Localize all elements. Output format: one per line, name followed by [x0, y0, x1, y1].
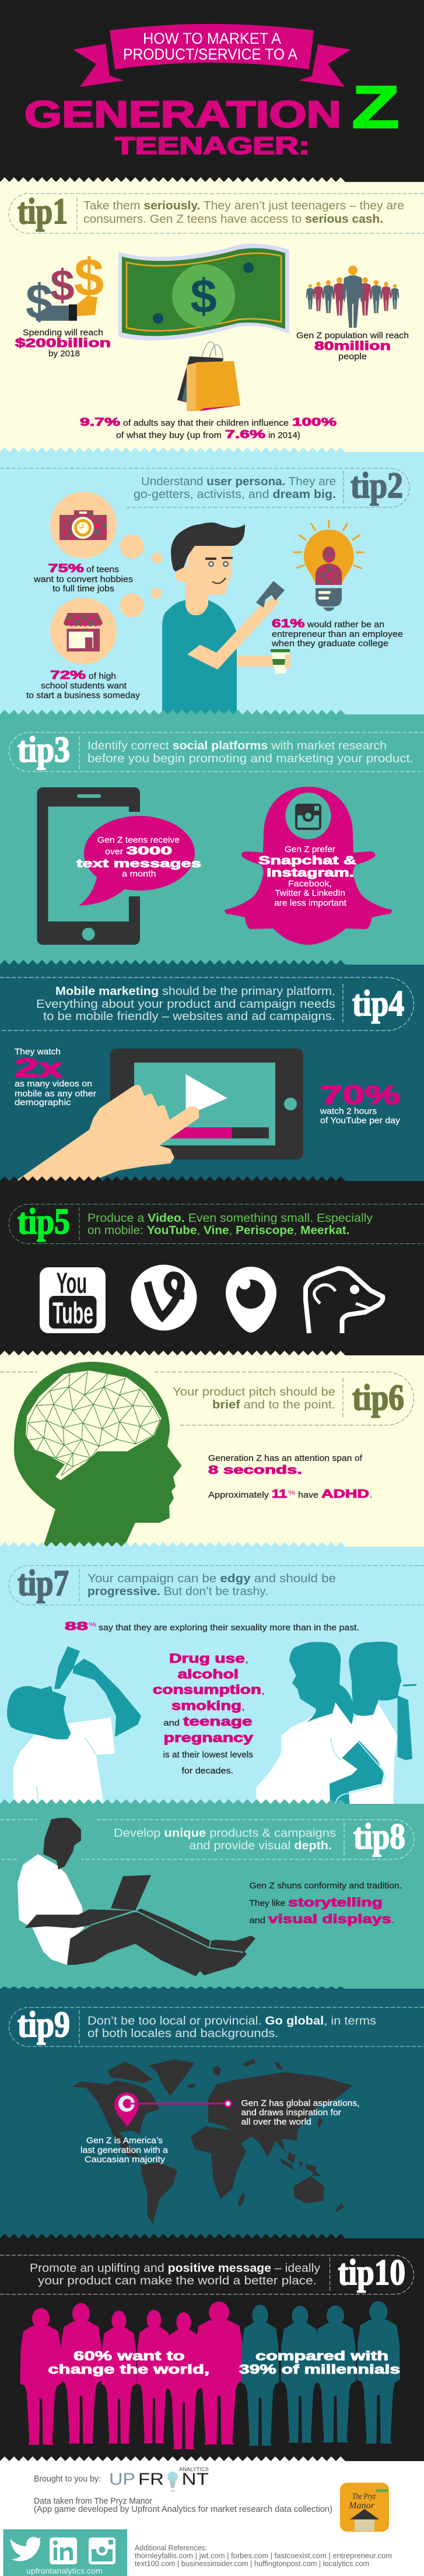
stat: gen z wants change: 60% want to	[73, 2349, 185, 2363]
stat: adults influence: 7.6%	[225, 429, 265, 441]
panel: header	[0, 0, 424, 182]
icon: shopping bags	[177, 342, 240, 411]
tip 7 label box	[9, 1565, 424, 1605]
stat: spending: by 2018	[48, 349, 80, 359]
tip 4 label box	[0, 977, 414, 1031]
tip 6 text: Your product pitch should be	[173, 1386, 335, 1399]
stat: 61 percent	[271, 617, 403, 649]
tip 7 text	[87, 1572, 336, 1598]
icon: pryz manor app: The Pryz	[352, 2492, 376, 2501]
panel: tip 2	[0, 447, 424, 719]
icon: dollar signs and hand: $	[74, 248, 104, 307]
stat: 2x videos: as many videos on	[15, 1079, 92, 1089]
tip 6 tag: tip6	[352, 1378, 404, 1418]
tip 4 tag: tip4	[352, 984, 404, 1024]
stat: millennials compare	[239, 2349, 400, 2377]
additional references: text100.com | businessinsider.com | huffingtonpost.com | localytics.com	[135, 2559, 369, 2568]
icon: dollar signs and hand: $	[26, 274, 53, 329]
tip 4 text: to be mobile friendly – websites and ad campaigns.	[43, 1010, 335, 1023]
panel: tip 10	[0, 2234, 424, 2463]
world map	[72, 2059, 353, 2224]
stat: attention span: 8 seconds.	[208, 1464, 302, 1477]
stat: 2x videos: They watch	[15, 1047, 61, 1057]
stat: 88 percent: %	[89, 1621, 96, 1628]
stat: storytelling: .	[392, 1915, 394, 1926]
icon: youtube: You	[56, 1267, 87, 1299]
tip 9 text	[87, 2014, 376, 2040]
tip 1 text: Take them seriously. They aren’t just teenagers – they are	[83, 199, 404, 212]
tip 2 tag: tip2	[351, 466, 403, 506]
speech bubble: Gen Z teens receive	[97, 835, 180, 845]
additional references	[135, 2543, 392, 2568]
list: declining risks: ,	[242, 1702, 244, 1712]
tip 10 text	[30, 2262, 320, 2287]
stat: 2x videos	[15, 1047, 96, 1107]
icon: snapchat ghost: are less important	[274, 898, 347, 908]
stat: 88 percent: 88	[65, 1620, 88, 1633]
tip 10 text: your product can make the world a better place.	[38, 2274, 317, 2287]
stat: gen z wants change: change the world,	[48, 2362, 209, 2377]
logo: upfront analytics: NT	[182, 2470, 209, 2489]
list: declining risks: alcohol	[178, 1667, 239, 1681]
tip 6 text: brief and to the point.	[212, 1399, 335, 1411]
additional references: Additional References:	[135, 2543, 207, 2552]
tip 1 text	[83, 199, 404, 226]
title line: how to market	[123, 30, 297, 63]
tip 10 tag: tip10	[338, 2253, 405, 2293]
tip 8 text: and provide visual depth.	[189, 1839, 332, 1852]
tip 8 label box	[0, 1820, 414, 1859]
icon: crowd of people	[306, 266, 399, 328]
stat: 70 percent: of YouTube per day	[320, 1116, 401, 1126]
list: declining risks: smoking	[171, 1698, 241, 1713]
stat: 75 percent: 75%	[48, 562, 84, 575]
stat: population: people	[338, 352, 367, 362]
stat: population: 80million	[314, 339, 391, 353]
stat: adhd: Approximately	[208, 1490, 269, 1500]
icon: snapchat ghost	[225, 787, 392, 945]
stat: 88 percent: say that they are exploring their sexuality more than in the past.	[99, 1622, 359, 1633]
icon: smartphone	[37, 787, 141, 945]
list: declining risks: ,	[262, 1687, 264, 1697]
stat: 61 percent: when they graduate college	[271, 639, 388, 649]
tip 5 text: Produce a Video. Even something small. Especially	[87, 1212, 373, 1225]
tip 3 text	[87, 739, 414, 765]
tip 9 text: of both locales and backgrounds.	[87, 2027, 279, 2040]
panel: tip 8	[0, 1799, 424, 1993]
tip 8 text: Develop unique products & campaigns	[114, 1827, 336, 1839]
stat: 72 percent: 72%	[50, 669, 86, 682]
stat: storytelling: and	[250, 1915, 265, 1926]
tip 4 text	[36, 985, 335, 1023]
list: declining risks: Drug use	[169, 1651, 245, 1666]
panel: tip 5	[0, 1176, 424, 1356]
logo: upfront analytics: UP	[109, 2470, 135, 2489]
stat: 75 percent: of teens	[86, 565, 119, 574]
speech bubble: a month	[122, 869, 156, 879]
stat: gen z wants change	[48, 2349, 209, 2377]
icon: periscope	[226, 1267, 276, 1333]
tip 6 label box	[0, 1372, 414, 1425]
title: teenager: TEENAGER:	[115, 132, 310, 159]
stat: adhd	[208, 1488, 372, 1501]
stat: 70 percent: 70%	[320, 1080, 400, 1110]
icon: dollar bill	[118, 244, 289, 341]
icon: meerkat	[306, 1268, 383, 1333]
stat: storytelling: They like	[250, 1898, 285, 1908]
tip 4 text: Mobile marketing should be the primary platform.	[55, 985, 335, 998]
stat: spending	[15, 328, 111, 359]
callout: caucasian majority	[80, 2136, 169, 2165]
callout: global aspirations	[241, 2098, 359, 2127]
list: declining risks: teenage	[183, 1714, 252, 1729]
stat: 2x videos: 2x	[15, 1053, 63, 1083]
stat: 61 percent: would rather be an	[307, 619, 384, 629]
tip 8 tag: tip8	[353, 1817, 405, 1856]
brought to you by: Brought to you by:	[34, 2474, 101, 2484]
list: declining risks: for decades.	[182, 1766, 233, 1776]
tip 5 text: on mobile: YouTube, Vine, Periscope, Meerkat.	[87, 1224, 350, 1237]
stat: population: Gen Z population will reach	[296, 331, 409, 341]
stat: adults influence: 9.7%	[80, 416, 120, 429]
stat: 88 percent	[65, 1620, 359, 1633]
tip 10 label box	[0, 2255, 414, 2294]
icon: dollar signs and hand: $	[50, 261, 75, 310]
stat: 72 percent	[26, 669, 141, 700]
panel: footer	[0, 2456, 424, 2576]
icon: snapchat ghost: Snapchat &	[258, 854, 356, 867]
data source	[34, 2496, 332, 2514]
additional references: thornleyfallis.com | jwt.com | forbes.com | fastcoexist.com | entrepreneur.com	[135, 2552, 392, 2560]
stat: 61 percent: entrepreneur than an employee	[272, 629, 403, 639]
stat: 75 percent: want to convert hobbies	[33, 574, 133, 584]
tip 1 label box	[9, 194, 424, 233]
illustration: teen drinking	[7, 1646, 141, 1808]
icon: snapchat ghost: Instagram.	[267, 867, 354, 879]
callout: caucasian majority: last generation with a	[80, 2145, 169, 2155]
speech bubble: 3000	[126, 845, 172, 857]
callout: global aspirations: and draws inspiration for	[241, 2108, 341, 2118]
silhouettes: millennial group	[241, 2301, 400, 2446]
tip 5 label box	[9, 1204, 424, 1243]
icon: linkedin	[50, 2538, 77, 2564]
icon: twitter	[10, 2537, 41, 2561]
icon: camera	[59, 510, 107, 540]
panel: tip 3	[0, 710, 424, 965]
panel: tip 6	[0, 1351, 424, 1548]
tip 5 tag: tip5	[17, 1202, 70, 1242]
tip 8 text	[114, 1827, 336, 1852]
website url: upfrontanalytics.com	[26, 2566, 103, 2575]
title: generation: GENERATION	[24, 93, 341, 135]
tip 5 text	[87, 1212, 373, 1237]
tip 9 tag: tip9	[17, 2005, 70, 2045]
tip 9 text: Don’t be too local or provincial. Go global , in terms	[87, 2014, 376, 2027]
stat: millennials compare: 39% of millennials	[239, 2362, 400, 2377]
stat: adhd: %	[288, 1489, 295, 1496]
tip 7 tag: tip7	[17, 1564, 69, 1603]
icon: vine	[131, 1264, 197, 1331]
panel: tip 9	[0, 1986, 424, 2241]
stat: adhd: 11	[272, 1488, 287, 1501]
tip 2 text	[134, 475, 336, 501]
stat: population	[296, 331, 409, 362]
stat: 72 percent: school students want	[41, 681, 127, 691]
tip 7 text: Your campaign can be edgy and should be	[87, 1572, 336, 1585]
icon: pryz manor app	[340, 2483, 389, 2532]
icon: dollar signs and hand	[26, 248, 104, 329]
icon: snapchat ghost: Facebook,	[288, 879, 332, 889]
stat: 70 percent	[320, 1080, 401, 1126]
icon: snapchat ghost: Gen Z prefer	[285, 844, 335, 854]
stat: adults influence: of adults say that their children influence	[123, 418, 289, 428]
icon: snapchat ghost: Twitter & LinkedIn	[275, 888, 345, 898]
list: declining risks: and	[163, 1718, 180, 1728]
tip 3 text: before you begin promoting and marketing your product.	[87, 752, 414, 765]
tip 6 text	[173, 1386, 335, 1411]
stat: adults influence: of what they buy (up from	[116, 430, 222, 440]
data source: (App game developed by Upfront Analytics for market research data collection)	[34, 2504, 332, 2514]
social box	[3, 2529, 127, 2576]
title line: how to market: HOW TO MARKET A	[143, 30, 281, 47]
stat: 75 percent: to full time jobs	[52, 584, 114, 594]
list: declining risks	[153, 1651, 264, 1776]
icon: store	[64, 613, 103, 651]
logo: upfront analytics: ANALYTICS	[179, 2466, 209, 2472]
stat: storytelling: visual displays	[268, 1913, 391, 1926]
tip 1 text: consumers. Gen Z teens have access to serious cash.	[83, 213, 383, 226]
stat: attention span	[208, 1453, 363, 1477]
stat: adults influence: in 2014)	[268, 430, 300, 440]
tip 10 text: Promote an uplifting and positive message – ideally	[30, 2262, 320, 2275]
tip 7 text: progressive. But don’t be trashy.	[87, 1585, 268, 1598]
icon: pointing hand	[12, 1085, 199, 1185]
illustration: smoker and pregnant teen	[255, 1642, 416, 1808]
icon: tablet with video	[110, 1049, 303, 1159]
callout: global aspirations: Gen Z has global aspirations,	[241, 2098, 359, 2108]
list: declining risks: ,	[246, 1655, 248, 1665]
list: declining risks: is at their lowest levels	[163, 1750, 253, 1760]
tip 1 tag: tip1	[17, 192, 68, 232]
logo: upfront analytics	[109, 2466, 209, 2491]
callout: global aspirations: all over the world	[241, 2117, 311, 2127]
illustration: head with brain	[14, 1362, 182, 1547]
stat: 72 percent: to start a business someday	[26, 691, 141, 700]
data source: Data taken from The Pryz Manor	[34, 2496, 152, 2506]
tip 3 label box	[9, 733, 424, 772]
stat: 72 percent: of high	[89, 671, 116, 681]
stat: storytelling: storytelling	[288, 1896, 383, 1909]
tip 4 text: Everything about your product and campaign needs	[36, 998, 335, 1011]
panel: tip 1	[0, 177, 424, 456]
speech bubble: text messages	[76, 858, 201, 870]
stat: storytelling	[250, 1881, 402, 1926]
speech bubble	[76, 816, 201, 906]
stat: adhd: have	[298, 1490, 318, 1500]
thought bubbles	[50, 492, 162, 664]
ribbon banner	[73, 24, 351, 87]
stat: adhd: .	[370, 1490, 372, 1500]
stat: adults influence: 100%	[292, 416, 337, 429]
illustration: teen with phone	[162, 523, 290, 719]
speech bubble: over	[105, 847, 123, 857]
map pin and link	[114, 2093, 231, 2126]
stat: millennials compare: compared with	[255, 2349, 388, 2363]
tip 2 text: go-getters, activists, and dream big.	[134, 488, 336, 501]
stat: adults influence	[80, 416, 337, 441]
stat: 2x videos: demographic	[15, 1098, 71, 1107]
title line: how to market: PRODUCT/SERVICE TO A	[123, 45, 297, 63]
stat: 2x videos: mobile as any other	[15, 1089, 96, 1099]
illustration: teen with laptop	[17, 1818, 255, 1976]
tip 3 text: Identify correct social platforms with market research	[87, 739, 387, 752]
stat: spending: $200billion	[15, 337, 111, 350]
tip 3 tag: tip3	[17, 730, 70, 770]
panel: tip 4	[0, 960, 424, 1185]
icon: lightbulb	[293, 520, 365, 611]
tip 2 label box	[0, 468, 409, 507]
title: Z: Z	[352, 73, 400, 141]
stat: attention span: Generation Z has an attention span of	[208, 1453, 363, 1463]
stat: 75 percent	[33, 562, 133, 594]
icon: dollar bill: $	[190, 270, 217, 323]
icon: pryz manor app: Manor	[348, 2501, 375, 2511]
callout: caucasian majority: Caucasian majority	[85, 2154, 166, 2165]
stat: storytelling: Gen Z shuns conformity and tradition.	[250, 1881, 402, 1891]
stat: adhd: ADHD	[321, 1488, 369, 1501]
tip 9 label box	[9, 2007, 424, 2046]
icon: youtube	[40, 1267, 106, 1333]
panel: tip 7	[0, 1542, 424, 1808]
stat: 70 percent: watch 2 hours	[320, 1106, 377, 1116]
icon: instagram	[89, 2538, 115, 2564]
list: declining risks: pregnancy	[163, 1730, 254, 1745]
logo: upfront analytics: FR	[138, 2470, 164, 2489]
silhouettes: gen z group	[20, 2301, 243, 2449]
stat: 61 percent: 61%	[272, 617, 305, 630]
list: declining risks: consumption	[153, 1683, 261, 1697]
stat: spending: Spending will reach	[23, 328, 103, 338]
tip 2 text: Understand user persona. They are	[141, 475, 336, 488]
callout: caucasian majority: Gen Z is America’s	[86, 2136, 163, 2146]
icon: youtube: Tube	[52, 1296, 93, 1330]
